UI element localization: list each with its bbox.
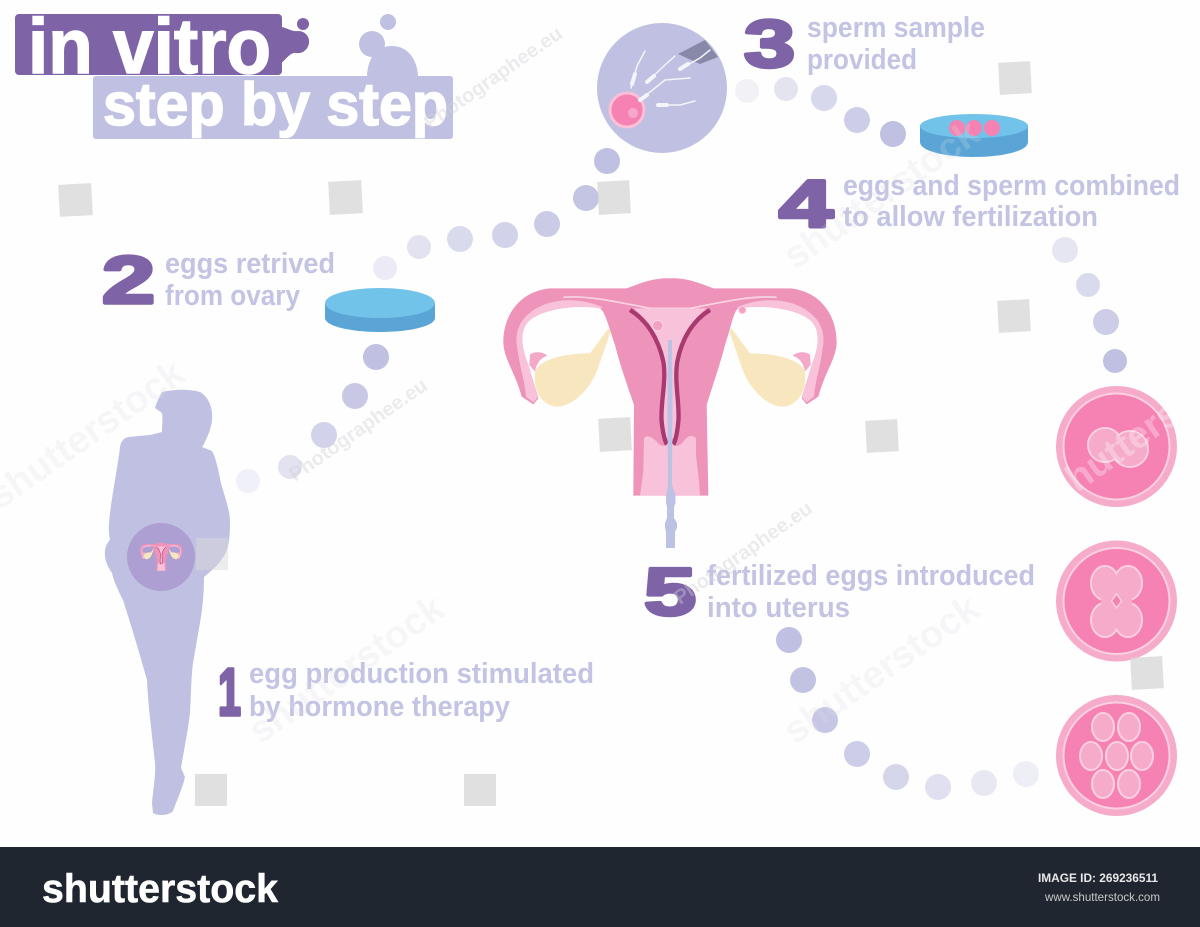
watermark text: shutterstock: [241, 587, 453, 752]
title band: in vitro: [15, 14, 282, 75]
step 1 text: egg production stimulated: [249, 658, 594, 690]
uterus diagram: [503, 278, 837, 548]
footer bar: [0, 847, 1200, 927]
dotted path: sperm sample to combined dish: [735, 77, 906, 147]
step 5: [644, 555, 1035, 630]
step 2 text: eggs retrived: [165, 248, 335, 280]
footer logo: shutterstock: [42, 867, 279, 911]
dotted path: dish to sperm sample: [373, 148, 620, 280]
footer url: www.shutterstock.com: [1044, 890, 1160, 904]
title decorative bubbles: [278, 14, 418, 78]
number 5: 5: [644, 555, 696, 630]
step 3: [744, 7, 985, 82]
number 1: 1: [218, 655, 241, 730]
silhouette: [105, 390, 230, 815]
step 1 text: by hormone therapy: [249, 691, 510, 723]
watermark text: shutterstock: [776, 112, 988, 277]
step 3 text: [807, 12, 985, 76]
number 2: 2: [102, 243, 155, 318]
pipette: [678, 40, 718, 64]
mini uterus: [140, 543, 183, 571]
heading: in vitro: in vitro: [28, 2, 271, 90]
petri dish: empty: [325, 288, 435, 332]
step 1 text: [249, 658, 594, 723]
watermark text: Photographee.eu: [285, 374, 432, 486]
petri dish with eggs: [920, 114, 1028, 157]
step 3 text: sperm sample: [807, 12, 985, 44]
watermark text: shutterstock: [776, 587, 988, 752]
catheter: [665, 340, 677, 548]
step 1: [218, 655, 594, 730]
woman silhouette with uterus inset: [105, 390, 230, 815]
embryo: seven cells: [1056, 695, 1177, 816]
step 2 text: [165, 248, 335, 312]
uterus inset circle: [127, 523, 195, 591]
watermark squares: [58, 61, 1164, 806]
title band: step by step: [93, 76, 453, 139]
step 4: [779, 167, 1180, 242]
egg: [610, 93, 644, 127]
step 2 text: from ovary: [165, 280, 300, 312]
number 3: 3: [744, 7, 795, 82]
sperm cells: [631, 50, 710, 105]
step 2: [102, 243, 335, 318]
heading: step by step: step by step: [103, 71, 448, 138]
step 5 text: [707, 560, 1035, 624]
embryo: two cells: [1056, 386, 1177, 507]
sperm sample circle: [597, 23, 727, 153]
image id: IMAGE ID: 269236511: [1038, 871, 1158, 885]
title: [15, 2, 453, 139]
step 4 text: to allow fertilization: [843, 201, 1098, 233]
watermark text: Photographee.eu: [420, 22, 567, 134]
dotted path: body to petri dish: [236, 344, 389, 493]
step 4 text: [843, 170, 1180, 233]
embryo: four cells: [1056, 540, 1177, 662]
dotted path: embryos to step 5: [776, 627, 1039, 800]
step 3 text: provided: [807, 44, 917, 76]
step 4 text: eggs and sperm combined: [843, 170, 1180, 202]
step 5 text: fertilized eggs introduced: [707, 560, 1035, 592]
step 5 text: into uterus: [707, 592, 850, 624]
watermark text: Photographee.eu: [670, 497, 817, 609]
number 4: 4: [779, 167, 833, 242]
dotted path: combined dish to embryos: [1052, 237, 1127, 373]
watermark text: [0, 22, 1200, 752]
